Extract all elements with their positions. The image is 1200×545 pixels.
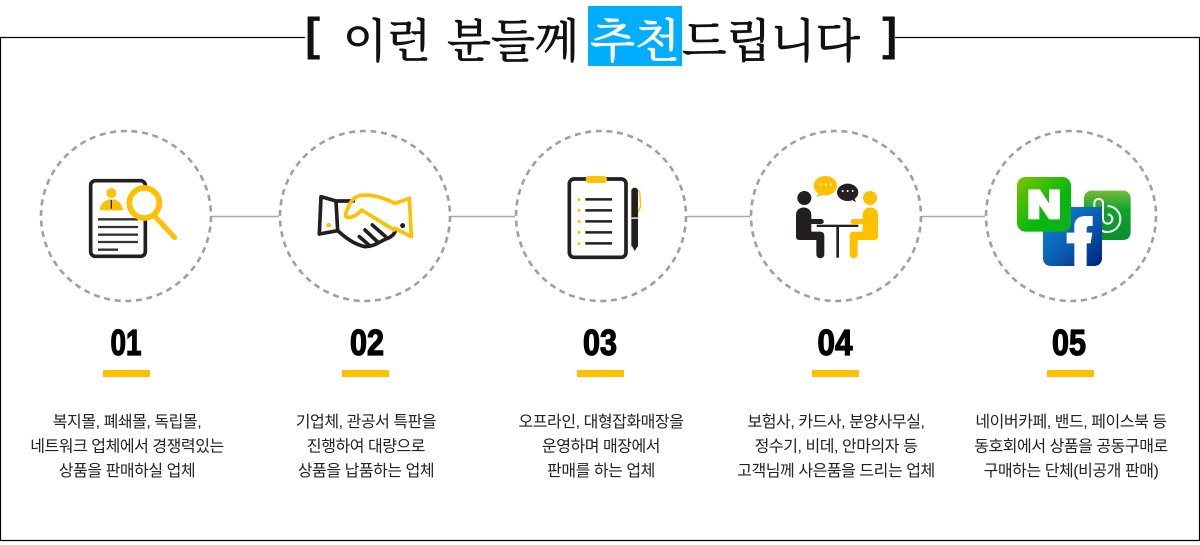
yellow bar 1 xyxy=(103,370,150,377)
title text right bracket: ] xyxy=(882,8,897,60)
title highlight box xyxy=(588,6,682,66)
description 5: 동호회에서 상품을 공동구매로 xyxy=(974,438,1168,456)
number 05: 05 xyxy=(1052,322,1086,363)
description 3: 판매를 하는 업체 xyxy=(547,462,655,480)
title xyxy=(305,5,897,71)
description 1: 복지몰, 폐쇄몰, 독립몰, xyxy=(53,413,201,431)
title text: 분들께: 분들께 xyxy=(447,5,579,71)
title text: 추천 highlighted: 추천 xyxy=(590,5,680,71)
description 2: 상품을 납품하는 업체 xyxy=(298,462,434,480)
step 3 xyxy=(516,131,686,480)
icon: two people talking at a table xyxy=(796,176,878,258)
step 4 xyxy=(737,131,935,480)
description 5: 네이버카페, 밴드, 페이스북 등 xyxy=(975,413,1167,431)
title text left bracket: [ xyxy=(305,8,320,60)
yellow bar 3 xyxy=(577,370,624,377)
icon: resume with magnifier xyxy=(91,181,175,256)
icon: naver cafe, band and facebook logos xyxy=(1017,177,1131,266)
description 4: 정수기, 비데, 안마의자 등 xyxy=(755,438,917,456)
description 3: 오프라인, 대형잡화매장을 xyxy=(519,413,683,431)
yellow bar 4 xyxy=(812,370,859,377)
step 5 xyxy=(974,131,1168,480)
description 1: 상품을 판매하실 업체 xyxy=(59,462,195,480)
description 1: 네트워크 업체에서 경쟁력있는 xyxy=(30,438,224,456)
dashed circle 1 xyxy=(41,131,211,301)
dashed circle 3 xyxy=(516,131,686,301)
description 2: 기업체, 관공서 특판을 xyxy=(296,413,436,431)
title text: 드립니다: 드립니다 xyxy=(682,5,861,71)
description 4: 보험사, 카드사, 분양사무실, xyxy=(748,413,924,431)
number 01: 01 xyxy=(110,322,142,363)
yellow bar 2 xyxy=(342,370,389,377)
dashed circle 2 xyxy=(280,131,450,301)
connector lines between circles xyxy=(212,216,985,218)
number 03: 03 xyxy=(583,322,617,363)
step 2 xyxy=(280,131,450,480)
description 3: 운영하며 매장에서 xyxy=(542,438,660,456)
description 5: 구매하는 단체(비공개 판매) xyxy=(984,462,1158,480)
number 04: 04 xyxy=(818,322,852,363)
yellow bar 5 xyxy=(1047,370,1094,377)
step 1 xyxy=(30,131,224,480)
dashed circle 5 xyxy=(986,131,1156,301)
number 02: 02 xyxy=(350,322,384,363)
dashed circle 4 xyxy=(751,131,921,301)
title text: 이런: 이런 xyxy=(343,5,431,71)
icon: handshake xyxy=(319,195,411,247)
description 4: 고객님께 사은품을 드리는 업체 xyxy=(737,462,935,480)
icon: clipboard and pen xyxy=(569,176,641,257)
description 2: 진행하여 대량으로 xyxy=(307,438,425,456)
